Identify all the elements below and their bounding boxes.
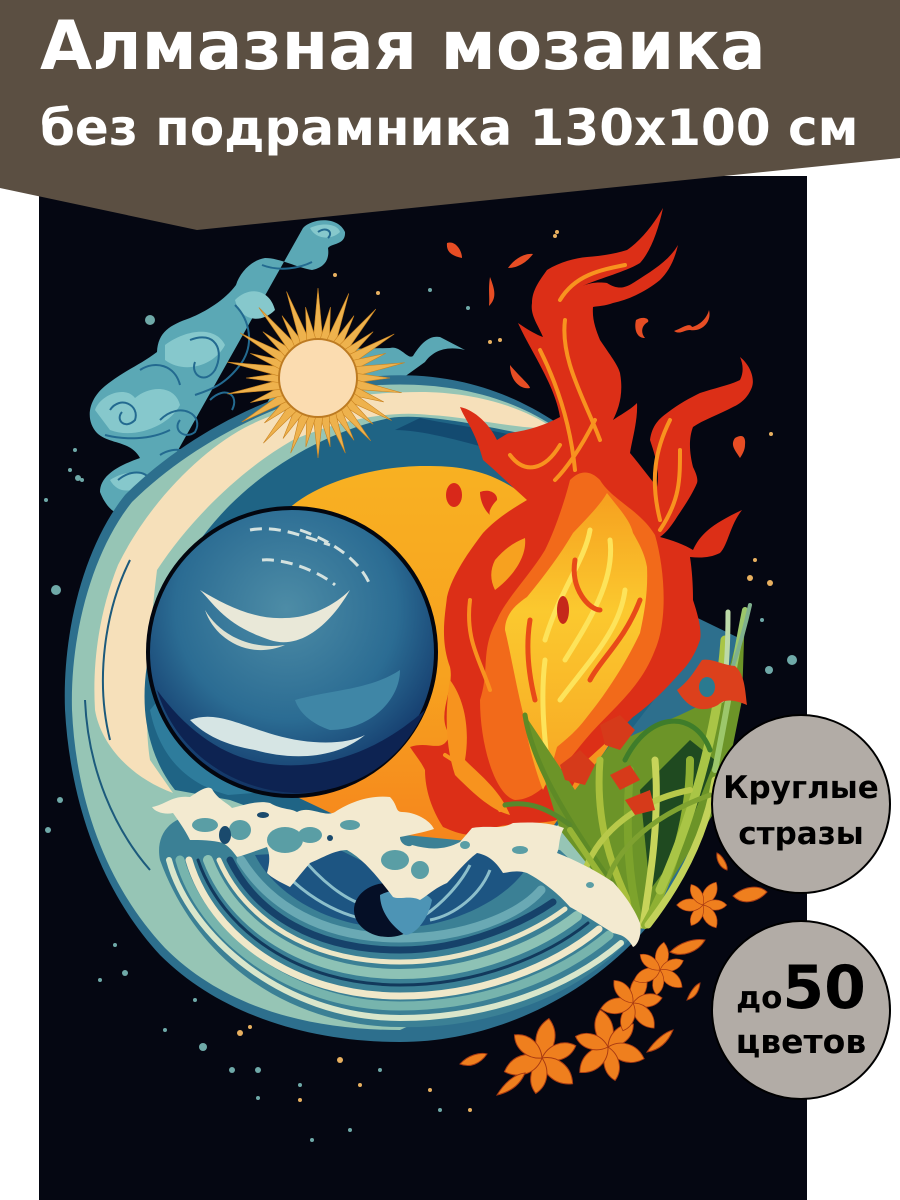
paint splatter dots	[44, 230, 797, 1142]
flying embers	[447, 242, 745, 458]
title line 1: Алмазная мозаика	[40, 6, 766, 85]
badge: up to 50 colours: цветов	[736, 1022, 866, 1061]
small red lilies	[560, 715, 655, 815]
cloud swirl	[90, 220, 465, 515]
badge: up to 50 colours	[711, 920, 891, 1100]
large red lily	[677, 660, 747, 709]
badge: round rhinestones: стразы	[738, 816, 864, 852]
orange moon	[292, 466, 608, 840]
crescent ring	[65, 375, 743, 1042]
sun	[227, 288, 406, 458]
lower-left flame tongues	[447, 680, 510, 815]
sun rays	[227, 288, 406, 458]
fire flames	[410, 208, 753, 835]
flame: moon gap	[491, 538, 525, 590]
orange flowers	[460, 853, 767, 1100]
dark background panel	[39, 176, 807, 1200]
badge: round rhinestones	[711, 714, 891, 894]
ocean wave	[152, 788, 641, 1027]
header banner	[0, 0, 900, 230]
badge: round rhinestones: Круглые	[723, 770, 879, 806]
grass and lilies	[505, 605, 750, 925]
moon spots	[446, 483, 497, 515]
badge: up to 50 colours: до50	[736, 953, 866, 1023]
title line 2: без подрамника 130х100 см	[40, 99, 859, 157]
earth globe	[148, 508, 436, 796]
wave foam	[152, 788, 641, 947]
